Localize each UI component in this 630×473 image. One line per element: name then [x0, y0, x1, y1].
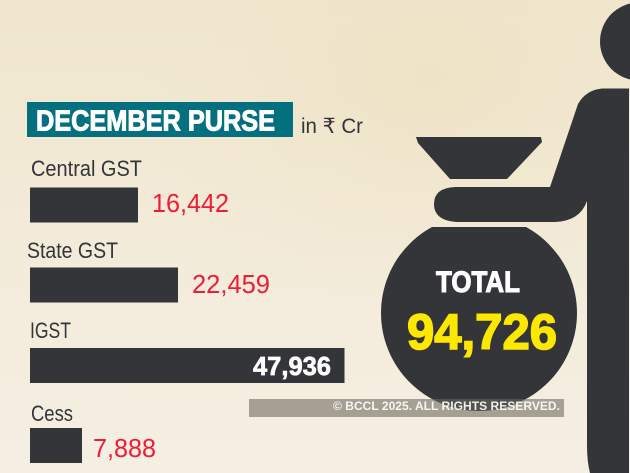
- watermark: © BCCL 2025. ALL RIGHTS RESERVED.: [333, 401, 560, 413]
- bar group: Central GST: 16,442: [152, 188, 229, 218]
- bar group: Central GST: [30, 156, 229, 222]
- icon: person holding money bag: [381, 2, 630, 473]
- bar group: State GST: [27, 238, 270, 302]
- bar group: Central GST: Central GST: [31, 156, 142, 181]
- total label: TOTAL: [436, 266, 520, 299]
- person head: [600, 2, 630, 80]
- bar group: Cess: Cess: [31, 401, 73, 426]
- bar group: Cess: [30, 401, 156, 463]
- heading: December Purse: DECEMBER PURSE: [36, 106, 275, 138]
- watermark: [249, 399, 564, 417]
- bar group: IGST: IGST: [30, 318, 71, 343]
- total value: 94,726: [407, 304, 557, 360]
- bar group: IGST: 47,936: [253, 351, 331, 381]
- person body and arm: [434, 88, 630, 473]
- unit label: in ₹ Cr: [301, 115, 363, 138]
- bar group: Cess: 7,888: [93, 433, 156, 463]
- bar group: State GST: 22,459: [192, 269, 270, 299]
- bar group: State GST: State GST: [27, 238, 118, 263]
- bag neck: [416, 137, 542, 179]
- bag body: [381, 215, 577, 411]
- bar group: IGST: [30, 318, 344, 383]
